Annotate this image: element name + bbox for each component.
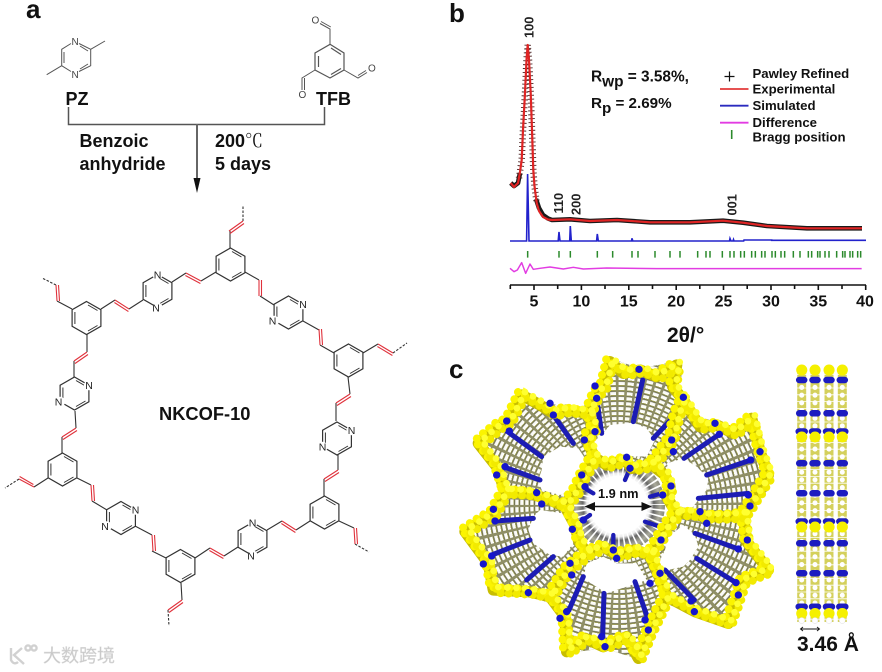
panel b: PXRD pattern: [449, 0, 874, 347]
pyrazine rings: N: [348, 425, 355, 437]
label TFB: TFB: [316, 89, 351, 109]
receding columns: [476, 361, 767, 657]
panel a: synthesis and framework: [5, 0, 407, 666]
pyrazine rings: [55, 270, 355, 562]
interlayer distance label: 3.46 Å: [797, 632, 859, 656]
condition: temperature and time: ℃: [245, 127, 263, 153]
molecule: PZ dimethylpyrazine: N: [72, 37, 79, 48]
condition: temperature and time: 5 days: [215, 154, 271, 174]
pyrazine rings: N: [249, 518, 256, 530]
Rwp value: = 3.58%,: [624, 68, 689, 86]
legend: simulated: Simulated: [752, 98, 816, 113]
x axis title: 2θ/°: [667, 324, 704, 347]
blue nitrogen atoms: [483, 369, 760, 647]
x tick labels: 40: [856, 294, 874, 310]
NKCOF-10 hexagonal framework: [5, 205, 407, 626]
Rwp value: wp: [601, 74, 624, 90]
molecule: TFB trialdehyde: O: [298, 90, 306, 101]
x axis: [510, 285, 866, 290]
molecule: PZ dimethylpyrazine: [47, 37, 105, 81]
difference curve: [510, 263, 862, 273]
central pore: [573, 466, 668, 548]
legend: difference: Difference: [752, 115, 817, 130]
molecule: TFB trialdehyde: [298, 16, 376, 101]
red vinylene double bonds: [19, 221, 393, 612]
watermark logo: [11, 645, 115, 666]
pyrazine rings: N: [247, 550, 255, 562]
peak label 100: 100: [522, 17, 536, 38]
watermark text: 大数跨境: [43, 646, 115, 666]
legend: Pawley refined: Pawley Refined: [752, 66, 849, 81]
watermark icon: [11, 645, 37, 664]
legend: Bragg position: Bragg position: [752, 130, 846, 145]
Rp value: R: [591, 95, 602, 112]
peak label 001: 001: [724, 194, 740, 216]
reaction bracket: [68, 107, 324, 124]
pore diameter arrow: [584, 502, 652, 511]
panel label c: c: [449, 354, 463, 384]
interlayer distance arrow: [800, 627, 820, 631]
molecule: TFB trialdehyde: O: [312, 16, 320, 26]
yellow framework atoms: [461, 359, 772, 661]
peak label 200: 200: [568, 194, 584, 215]
experimental curve with Pawley fit: [511, 45, 862, 228]
condition: benzoic anhydride: anhydride: [80, 154, 166, 174]
Rp value: p: [602, 100, 611, 117]
benzene nodes: [48, 248, 363, 582]
panel c: space-filling structure: [449, 350, 859, 667]
x tick labels: 35: [809, 294, 827, 310]
blue column stripes: [492, 380, 751, 637]
x tick labels: 10: [573, 294, 590, 310]
pyrazine rings: N: [101, 521, 109, 533]
pyrazine rings: N: [55, 396, 62, 408]
legend: [720, 66, 849, 145]
pyrazine rings: N: [132, 504, 139, 516]
single bonds: [34, 231, 378, 600]
x tick labels: 25: [715, 294, 732, 310]
pyrazine rings: N: [319, 442, 326, 454]
pyrazine rings: N: [152, 302, 160, 314]
peak label 110: 110: [551, 193, 566, 214]
condition: temperature and time: 200: [215, 131, 245, 151]
molecule: TFB trialdehyde: O: [368, 64, 376, 74]
outer pore openings: [528, 423, 708, 593]
legend: experimental: Experimental: [752, 82, 835, 96]
label NKCOF-10: NKCOF-10: [159, 403, 250, 424]
x tick labels: 15: [620, 294, 638, 310]
molecule: PZ dimethylpyrazine: N: [72, 70, 79, 81]
pyrazine rings: N: [85, 380, 93, 392]
top-view model of NKCOF-10 pores: [450, 350, 783, 667]
pyrazine rings: N: [299, 299, 307, 311]
Rp value: = 2.69%: [611, 95, 672, 112]
pyrazine rings: N: [154, 270, 161, 282]
reaction arrow: [194, 124, 200, 193]
pore diameter label: 1.9 nm: [598, 486, 639, 501]
side-view stacked columns: [799, 368, 845, 624]
x tick labels: 30: [762, 294, 780, 310]
dashed continuation bonds: [5, 205, 407, 626]
x tick labels: 5: [530, 294, 539, 310]
condition: benzoic anhydride: Benzoic: [80, 131, 149, 151]
simulated pattern: [510, 174, 866, 241]
pyrazine rings: N: [269, 316, 276, 328]
Rwp value: R: [591, 68, 602, 86]
Bragg position ticks: [528, 251, 861, 258]
label PZ: PZ: [66, 89, 89, 109]
x tick labels: 20: [667, 294, 685, 310]
